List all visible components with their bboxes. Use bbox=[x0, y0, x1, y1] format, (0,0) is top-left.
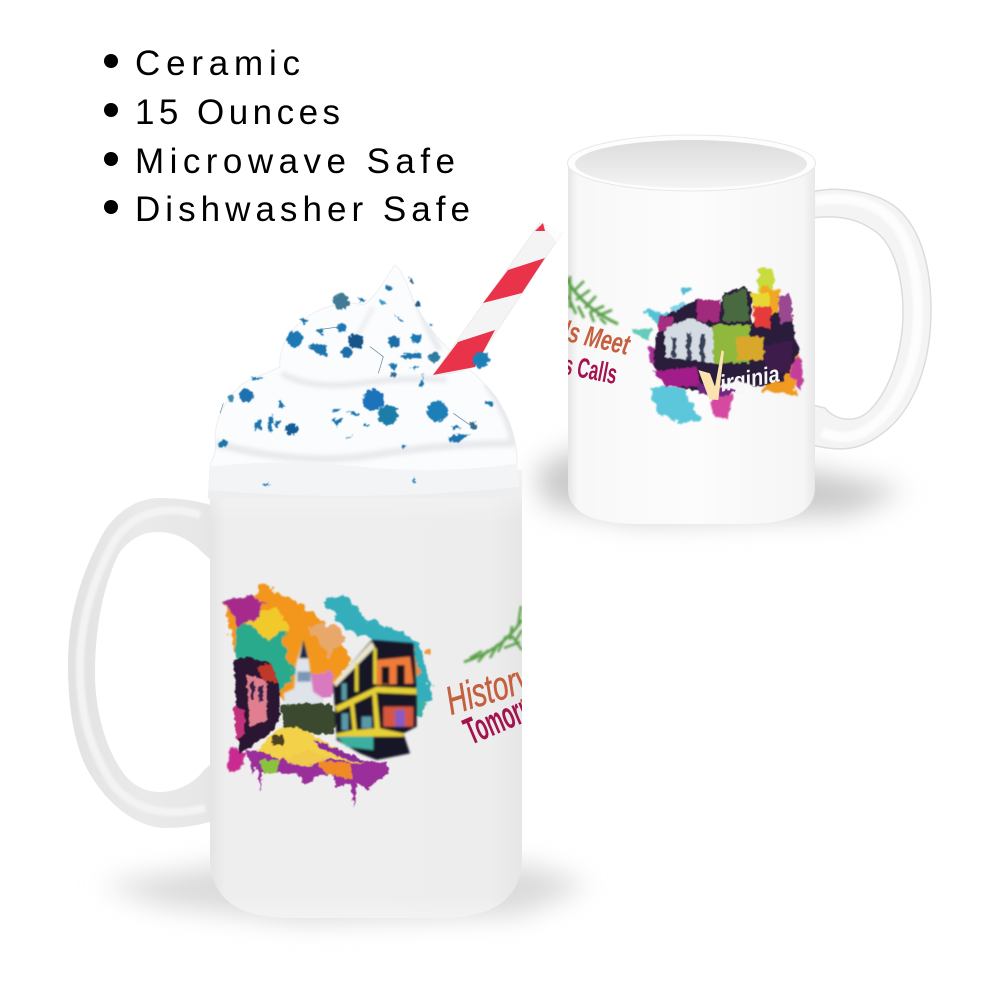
front mug shadow bbox=[100, 865, 590, 922]
slogan line 2: Tomorr bbox=[458, 689, 535, 753]
sprinkle stems bbox=[220, 327, 470, 425]
back mug body bbox=[568, 162, 815, 524]
drips bbox=[243, 737, 388, 808]
paint splash background bbox=[224, 583, 433, 771]
city skyline bbox=[653, 287, 800, 397]
central trees and street bbox=[257, 703, 367, 763]
back mug rim bbox=[568, 135, 816, 191]
slogan line 1: Halls Meet bbox=[530, 309, 634, 362]
paint splashes bbox=[635, 268, 803, 423]
front mug handle bbox=[68, 498, 216, 828]
left townhouse bbox=[233, 657, 280, 753]
cream mass bbox=[208, 265, 522, 498]
front mug colourful street artwork bbox=[224, 583, 433, 808]
slogan leaf sprig bbox=[464, 606, 522, 662]
back mug bbox=[530, 135, 931, 524]
back mug interior bbox=[575, 140, 807, 188]
blue sprinkles on the cream bbox=[219, 278, 493, 487]
front mug bbox=[68, 223, 590, 922]
back mug handle bbox=[812, 189, 931, 449]
bullet: Ceramic: Ceramic bbox=[135, 44, 300, 83]
back mug slogan bbox=[568, 274, 632, 384]
slogan leaf sprig bbox=[566, 276, 618, 324]
right colonial building bbox=[333, 640, 417, 760]
church with steeple bbox=[283, 640, 323, 717]
slogan line 2: d's Calls bbox=[547, 346, 620, 390]
bullet: 15 Ounces: 15 Ounces bbox=[135, 93, 340, 132]
bullet: Microwave Safe: Microwave Safe bbox=[135, 142, 455, 181]
front mug body bbox=[210, 470, 522, 918]
cream shading bbox=[209, 308, 521, 498]
straw bbox=[433, 223, 562, 375]
feature list bbox=[104, 44, 470, 229]
back mug Virginia artwork bbox=[635, 268, 803, 423]
whipped cream topping bbox=[208, 223, 562, 498]
blue sprinkle clusters bbox=[219, 278, 493, 487]
bullet: Dishwasher Safe: Dishwasher Safe bbox=[135, 190, 470, 229]
slogan line 1: History bbox=[441, 656, 538, 724]
Virginia lettering bbox=[698, 350, 782, 400]
front mug slogan bbox=[447, 604, 522, 744]
back mug shadow bbox=[535, 450, 905, 522]
front mug highlights bbox=[210, 470, 522, 918]
Virginia lettering: irginia bbox=[718, 361, 782, 397]
